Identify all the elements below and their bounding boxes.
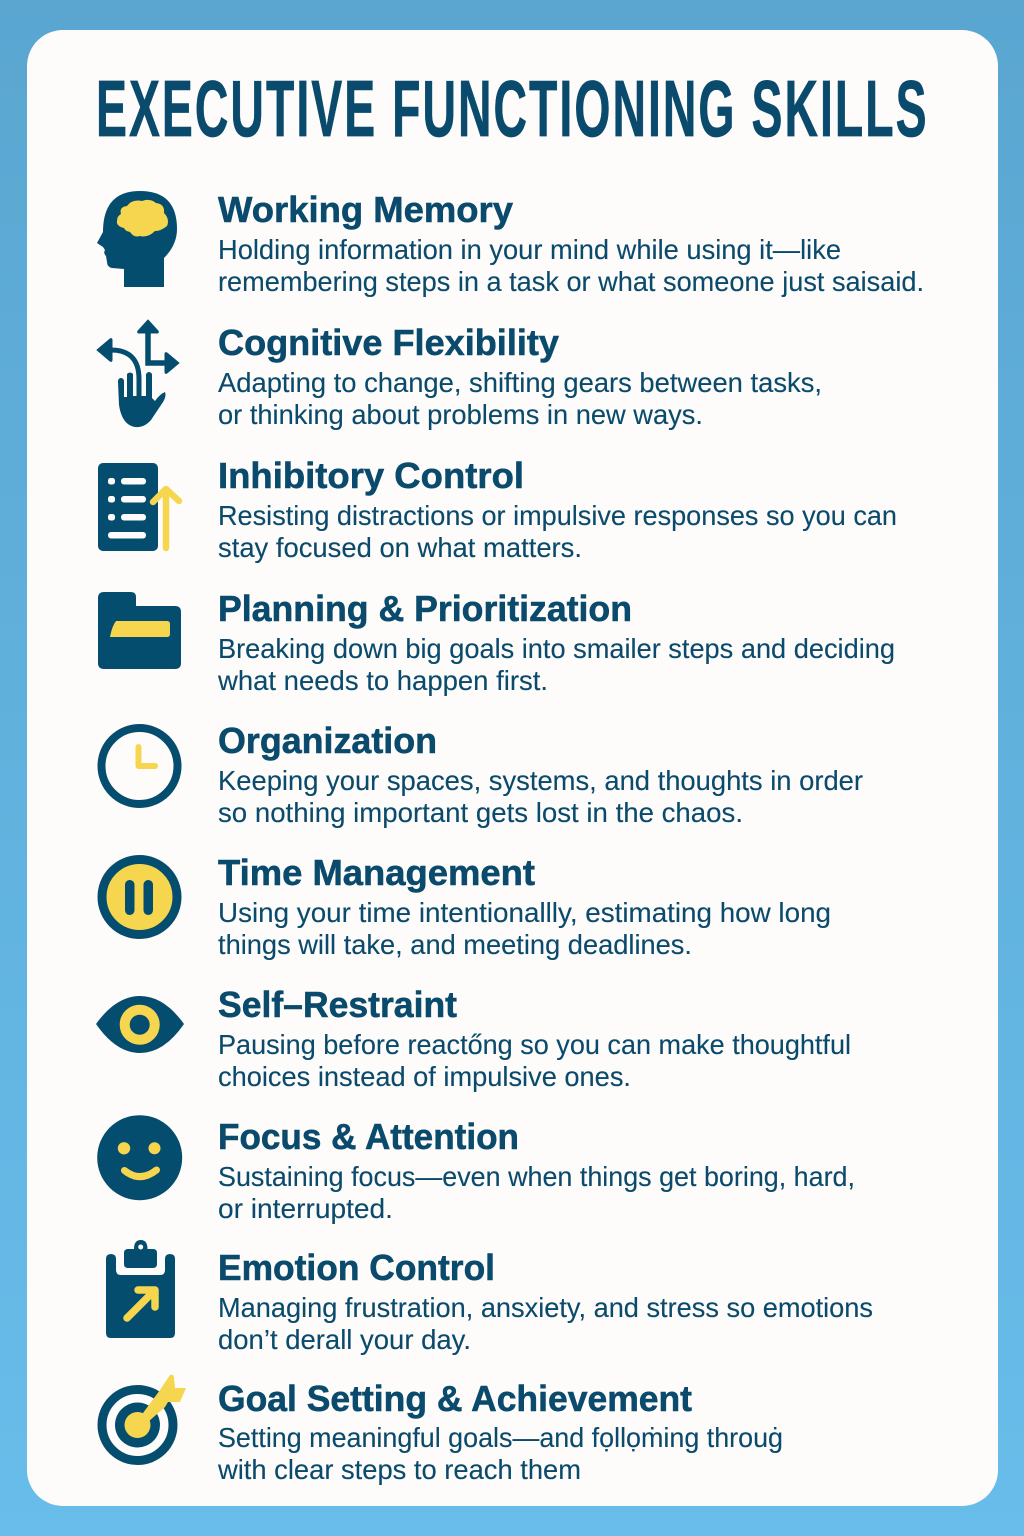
description: planning and prioritization [217, 633, 895, 696]
icon: smiley face [97, 1115, 182, 1200]
description: organization: so nothing important gets lost in the chaos. [218, 797, 743, 828]
icon: clipboard with arrow [106, 1240, 175, 1338]
heading: cognitive flexibility: Cognitive Flexibility [218, 322, 559, 363]
heading: emotion control: Emotion Control [218, 1247, 495, 1288]
description: goal setting and achievement: Setting meaningful goals—and fọllọṁing throuġ [218, 1422, 783, 1453]
description: cognitive flexibility: or thinking about problems in new ways. [218, 399, 703, 430]
description: organization: Keeping your spaces, systems, and thoughts in order [218, 765, 863, 796]
description: self-restraint: Pausing before reactőng so you can make thoughtful [218, 1029, 851, 1060]
description: goal setting and achievement [217, 1422, 783, 1485]
description: organization [218, 765, 863, 828]
heading: inhibitory control: Inhibitory Control [218, 455, 524, 496]
heading: goal setting and achievement: Goal Setting & Achievement [218, 1378, 692, 1419]
description: self-restraint [218, 1029, 851, 1092]
heading: planning and prioritization: Planning & Prioritization [218, 588, 632, 629]
icon: eye [96, 996, 184, 1053]
description: emotion control: don’t derall your day. [218, 1324, 471, 1355]
description: inhibitory control: Resisting distractions or impulsive responses so you can [218, 500, 897, 531]
icon: target with dart [102, 1375, 186, 1460]
icon: folder [98, 592, 181, 669]
description: time management [218, 897, 831, 960]
panel: time management [102, 852, 831, 960]
description: emotion control [218, 1292, 873, 1355]
description: inhibitory control [218, 500, 897, 563]
description: time management: things will take, and meeting deadlines. [218, 929, 692, 960]
description: emotion control: Managing frustration, ansxiety, and stress so emotions [218, 1292, 873, 1323]
description: cognitive flexibility [218, 367, 822, 430]
panel: self-restraint [96, 984, 851, 1092]
icon: pause button [102, 860, 177, 934]
icon: clock [102, 728, 178, 804]
description: working memory: Holding information in your mind while using it—like [218, 234, 841, 265]
icon: hand with direction arrows [97, 320, 179, 427]
description: working memory: remembering steps in a task or what someone just saisaid. [218, 266, 924, 297]
panel: planning and prioritization [98, 588, 895, 696]
description: inhibitory control: stay focused on what matters. [218, 532, 582, 563]
heading: focus and attention: Focus & Attention [218, 1116, 519, 1157]
description: planning and prioritization: what needs to happen first. [217, 665, 548, 696]
description: focus and attention [218, 1161, 855, 1224]
panel: organization [102, 720, 863, 828]
description: cognitive flexibility: Adapting to change, shifting gears between tasks, [218, 367, 822, 398]
heading: working memory: Working Memory [218, 189, 513, 230]
title: EXECUTIVE FUNCTIONING SKILLS [96, 64, 927, 153]
heading: self-restraint: Self–Restraint [218, 984, 457, 1025]
description: focus and attention: Sustaining focus—even when things get boring, hard, [218, 1161, 855, 1192]
description: working memory [218, 234, 924, 297]
description: planning and prioritization: Breaking down big goals into smailer steps and deciding [218, 633, 895, 664]
heading: time management: Time Management [218, 852, 535, 893]
icon: head with brain [97, 191, 177, 287]
description: focus and attention: or interrupted. [218, 1193, 393, 1224]
description: time management: Using your time intentionallly, estimating how long [218, 897, 831, 928]
panel: working memory [97, 189, 924, 297]
panel: focus and attention [97, 1115, 855, 1224]
panel: inhibitory control [98, 455, 897, 563]
panel: cognitive flexibility [97, 320, 822, 430]
panel: emotion control [106, 1240, 873, 1355]
panel: goal setting and achievement [102, 1375, 783, 1485]
heading: organization: Organization [218, 720, 437, 761]
icon: checklist with up arrow [98, 463, 179, 551]
description: goal setting and achievement: with clear steps to reach them [217, 1454, 581, 1485]
description: self-restraint: choices instead of impulsive ones. [218, 1061, 631, 1092]
